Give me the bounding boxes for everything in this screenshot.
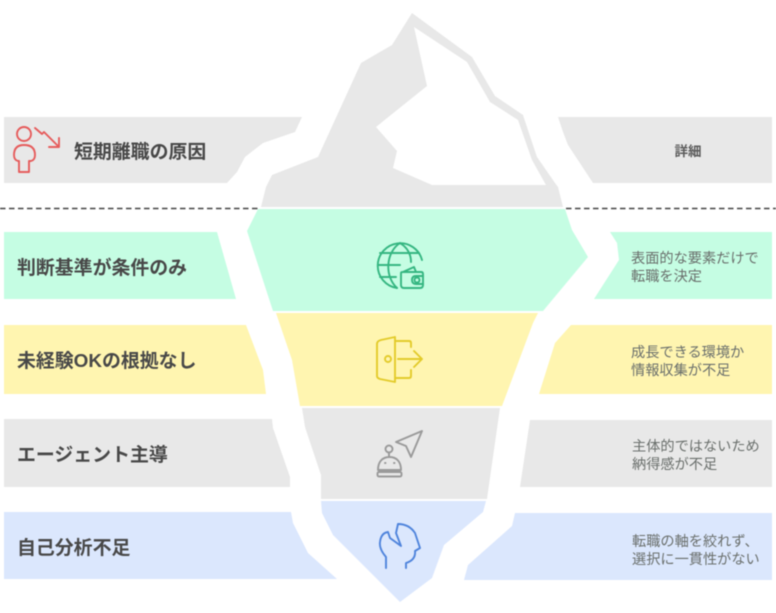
icon: robot and navigation arrow (378, 431, 422, 476)
panel: row 2 left (4, 325, 266, 394)
heading: right: 詳細 (674, 143, 702, 159)
heading: left: 短期離職の原因 (74, 141, 206, 163)
panel: row 1 right: 表面的な要素だけで (631, 251, 759, 267)
iceberg segment: gray (302, 408, 500, 499)
icon: door exit (377, 337, 422, 382)
icon: globe and wallet (378, 243, 423, 288)
panel: row 1 right (594, 232, 772, 299)
iceberg segment: blue (321, 501, 486, 602)
panel: header right (558, 117, 772, 183)
panel: row 2 left: 未経験OKの根拠なし (17, 350, 196, 372)
panel: row 4 left (4, 512, 337, 579)
panel: row 4 left: 自己分析不足 (17, 537, 130, 559)
iceberg: tip above water (261, 13, 563, 207)
panel: row 2 right: 成長できる環境か (631, 345, 744, 361)
panel: header left (4, 117, 302, 183)
panel: row 1 left (4, 232, 236, 299)
waterline (0, 208, 776, 210)
iceberg segment: green (247, 209, 588, 311)
iceberg segment: yellow (276, 313, 538, 406)
panel: row 3 right: 納得感が不足 (632, 456, 717, 473)
panel: row 4 right: 選択に一貫性がない (632, 552, 760, 568)
panel: row 3 right: 主体的ではないため (632, 439, 760, 455)
panel: row 1 right: 転職を決定 (631, 269, 702, 285)
panel: row 2 right: 情報収集が不足 (631, 363, 730, 379)
panel: row 4 right: 転職の軸を絞れず、 (632, 534, 759, 550)
panel: row 3 left: エージェント主導 (17, 444, 168, 466)
panel: row 2 right (539, 325, 772, 394)
panel: row 4 right (464, 513, 772, 580)
panel: row 3 right (520, 420, 772, 487)
icon: cracked head (380, 524, 420, 568)
panel: row 1 left: 判断基準が条件のみ (17, 256, 187, 279)
panel: row 3 left (4, 419, 290, 487)
icon: person with falling arrow (14, 127, 59, 172)
